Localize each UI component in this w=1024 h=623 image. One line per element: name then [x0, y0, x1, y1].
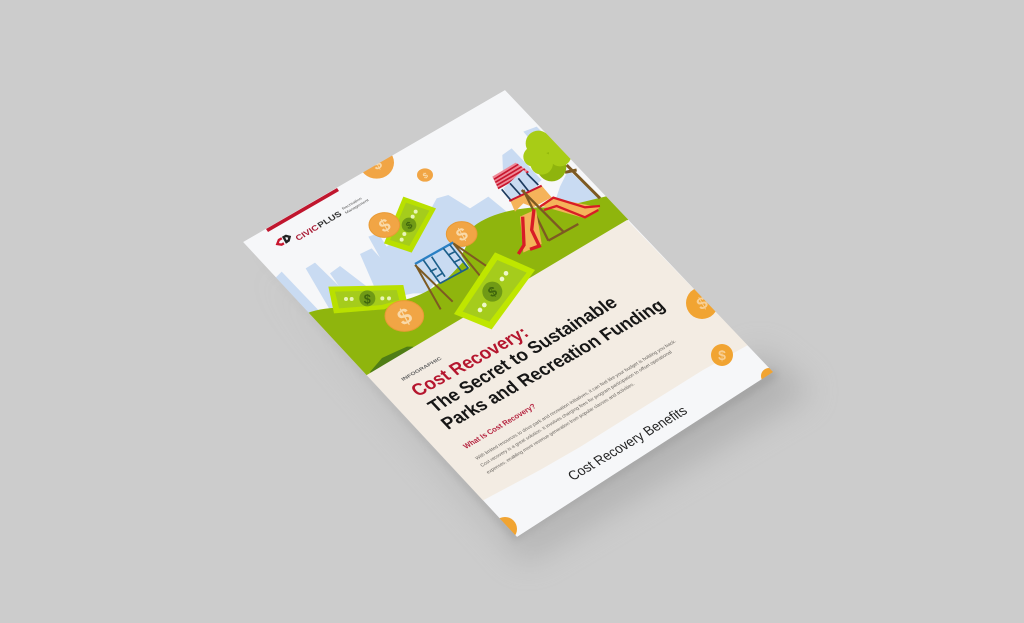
coin: lower right: [711, 344, 733, 366]
logo: [276, 196, 370, 248]
illustration: park scene: [275, 127, 633, 380]
logo sub label: Recreation: [341, 196, 363, 211]
banknote: left: [328, 285, 407, 313]
coin: top: $: [370, 156, 385, 174]
logo mark: [276, 234, 292, 246]
coin: centre: [446, 222, 477, 246]
illustration: playground: [492, 131, 600, 254]
coin: right edge: $: [693, 293, 712, 314]
skyline: [275, 127, 602, 317]
coin: lower right: $: [718, 347, 726, 363]
swing set: [415, 242, 487, 309]
banknote: upper: [384, 197, 436, 253]
banknote: left: $: [364, 292, 371, 306]
title: Cost Recovery:: [407, 323, 533, 400]
coin: centre: $: [453, 223, 471, 246]
page shadow: [245, 246, 812, 562]
page paper: [243, 90, 773, 537]
green hills: [298, 195, 633, 380]
beige content band: [350, 220, 748, 502]
coin: lower: [385, 301, 424, 331]
illustration: large banknote: $: [485, 283, 500, 301]
banknote: upper: $: [404, 220, 415, 232]
coin: right edge: [686, 289, 716, 319]
title: Parks and Recreation Funding: [437, 296, 669, 433]
coin: top: [363, 156, 394, 179]
body text: Cost recovery is a great solution. It involves charging fees for program participation to offset operational: [480, 350, 673, 468]
subheading: What Is Cost Recovery?: [461, 402, 538, 450]
coin: right corner: [761, 368, 773, 380]
logo wordmark: CIVIC: [294, 223, 321, 242]
infographic page: [243, 90, 777, 541]
title: [407, 293, 669, 433]
slide: right: [540, 198, 600, 218]
body text: With limited resources to drive park and recreation initiatives, it can feel like your budget is holding you back.: [475, 339, 678, 461]
section heading: Cost Recovery Benefits: [565, 404, 691, 484]
coin: small: $: [421, 170, 430, 181]
title: The Secret to Sustainable: [424, 293, 622, 416]
coin: left: [369, 213, 400, 237]
coin: bottom corner: [500, 517, 517, 536]
coin: left: $: [375, 214, 394, 237]
eyebrow label: INFOGRAPHIC: [401, 356, 443, 382]
coin: lower: $: [393, 302, 417, 331]
illustration: large banknote: [454, 252, 535, 329]
play tower: [492, 163, 578, 241]
body text: expenses, enabling more revenue generation from popular classes and activities.: [486, 382, 636, 475]
logo: Management: [344, 197, 370, 215]
coin: small: [417, 168, 433, 182]
slide: left: [518, 209, 542, 254]
top red accent bar: [266, 188, 339, 232]
tree: [523, 131, 600, 198]
logo: PLUS: [316, 209, 343, 229]
